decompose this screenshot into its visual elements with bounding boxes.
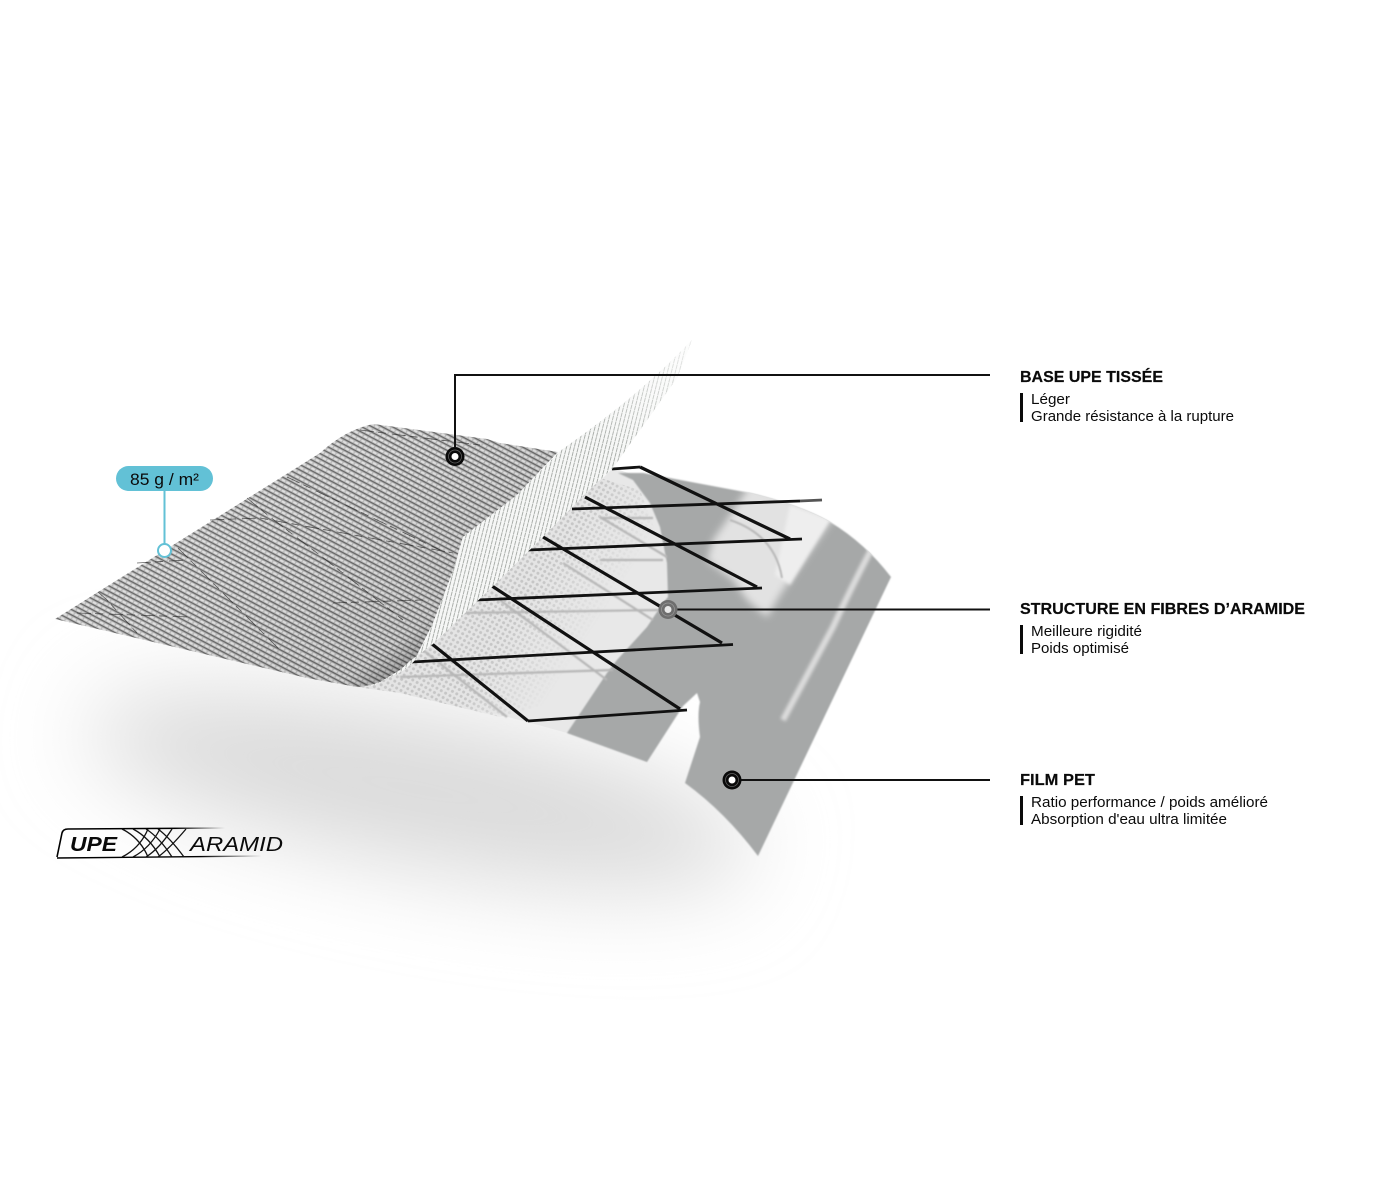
layer: PET film bbox=[357, 468, 891, 856]
accent bar bbox=[1020, 393, 1023, 422]
callout: 85 g / m2 bbox=[116, 466, 213, 557]
layer: woven UPE base folded underside bbox=[357, 340, 692, 687]
logo crossing fibres bbox=[122, 829, 186, 857]
film light patch bbox=[707, 485, 835, 617]
film light base bbox=[357, 468, 700, 762]
drop shadow under the material bbox=[72, 651, 768, 929]
line 2: Grande résistance à la rupture bbox=[1031, 409, 1234, 425]
text block: base UPE tissée bbox=[1020, 367, 1234, 425]
text block: structure en fibres d'aramide bbox=[1020, 601, 1305, 657]
line 1: Meilleure rigidité bbox=[1031, 624, 1142, 640]
accent bar bbox=[1020, 796, 1023, 825]
heading: STRUCTURE EN FIBRES D’ARAMIDE bbox=[1020, 601, 1305, 618]
logo: UPE aramid bbox=[57, 828, 283, 858]
film fibre reflection bbox=[730, 520, 782, 578]
infographic: UPE aramid laminate layers bbox=[55, 340, 1304, 922]
heading: FILM PET bbox=[1020, 772, 1095, 789]
callout pill bbox=[116, 466, 213, 491]
layer: aramid fibre grid bbox=[412, 467, 822, 721]
line 1: Léger bbox=[1031, 392, 1070, 408]
film light streak bbox=[783, 548, 872, 720]
line 2: Absorption d'eau ultra limitée bbox=[1031, 812, 1227, 828]
callout value: 85 g / m² bbox=[130, 470, 199, 489]
fibre shadows bbox=[400, 517, 667, 717]
horizontal fibres bbox=[412, 467, 822, 721]
layer: woven UPE base top face bbox=[55, 424, 558, 687]
film mesh imprint bbox=[357, 478, 655, 717]
line 2: Poids optimisé bbox=[1031, 641, 1129, 657]
dark weave seams bbox=[77, 430, 480, 650]
logo UPE wordmark: UPE bbox=[70, 834, 118, 856]
film reflections bbox=[707, 485, 872, 720]
accent bar bbox=[1020, 625, 1023, 654]
heading: BASE UPE TISSÉE bbox=[1020, 367, 1163, 386]
leader: aramid structure bbox=[658, 600, 990, 619]
logo ARAMID wordmark: ARAMID bbox=[189, 834, 283, 856]
line 1: Ratio performance / poids amélioré bbox=[1031, 795, 1268, 811]
film grey area bbox=[567, 473, 891, 856]
text block: film PET bbox=[1020, 772, 1268, 828]
diagonal fibres bbox=[432, 467, 790, 721]
film bright edge highlight bbox=[775, 505, 830, 585]
callout leader bbox=[164, 491, 166, 545]
leader: base UPE bbox=[446, 375, 990, 466]
leader: PET film bbox=[722, 770, 990, 790]
callout anchor circle bbox=[158, 544, 171, 557]
logo frame bbox=[57, 828, 225, 857]
